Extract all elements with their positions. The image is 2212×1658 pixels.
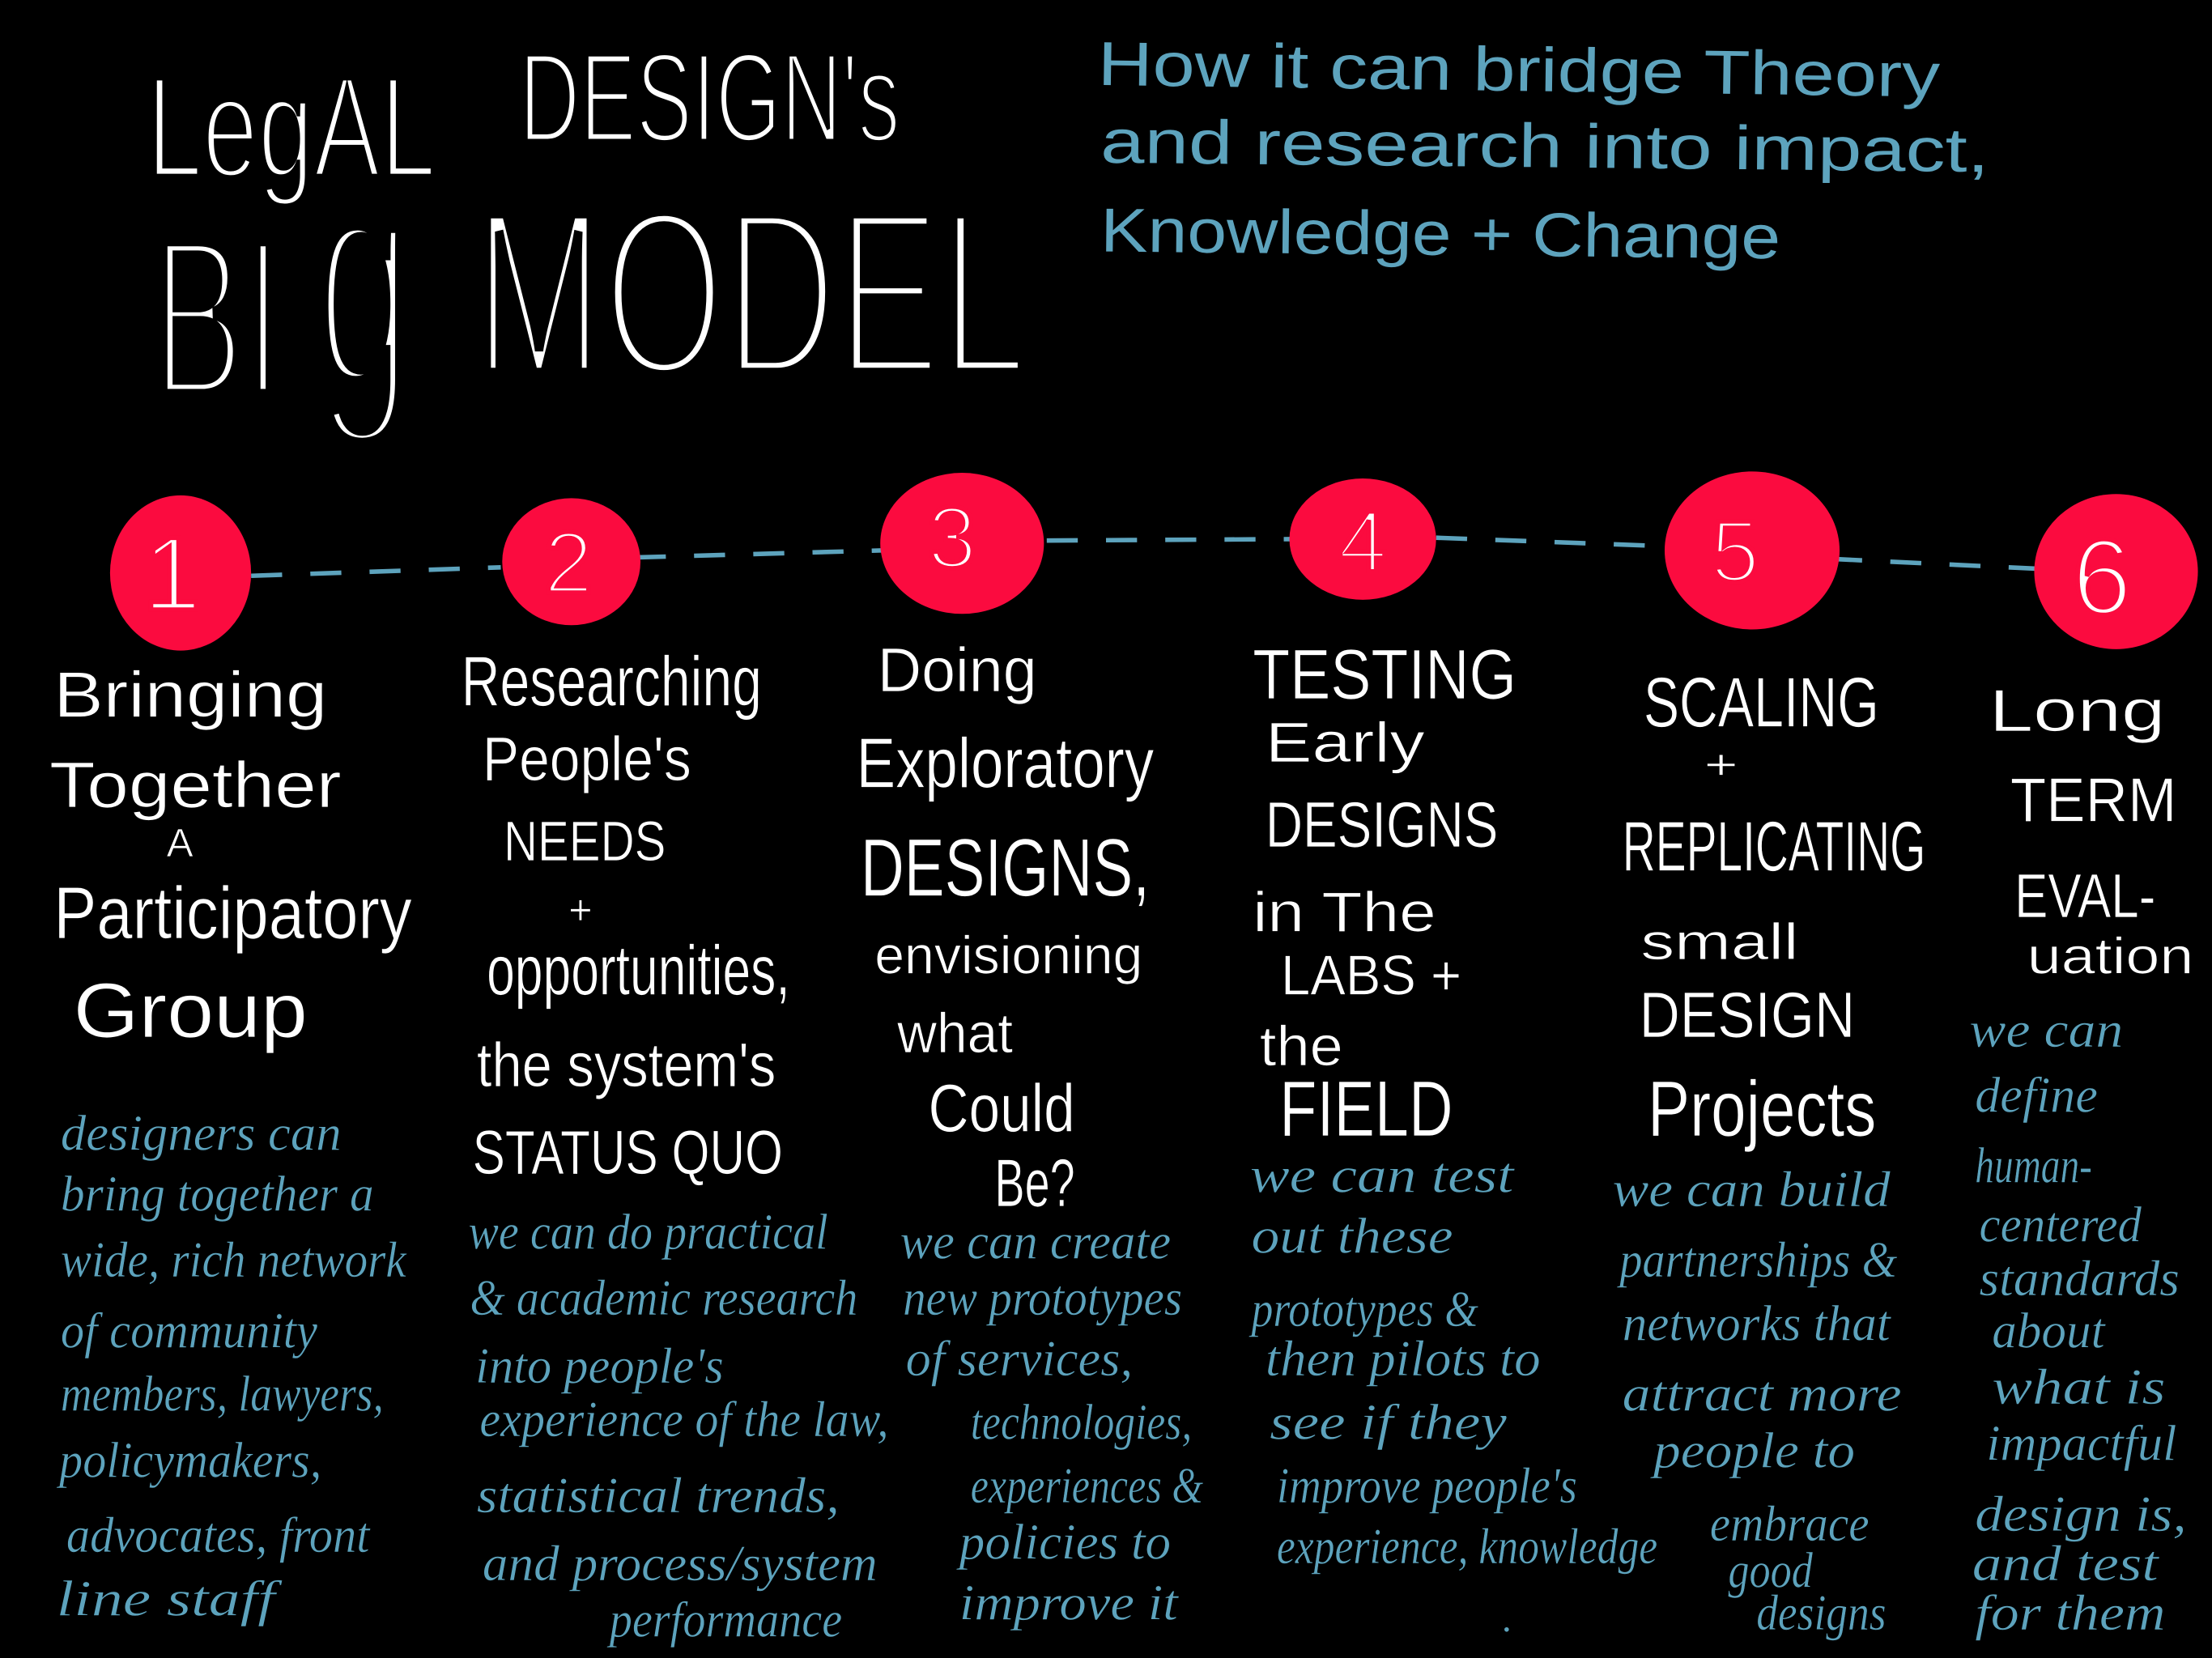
heading 2: STATUS QUO [473,1119,783,1188]
heading 6: uation [2027,929,2193,985]
heading 4: FIELD [1279,1065,1453,1153]
body text 2 [468,1203,889,1647]
step 6: long term evaluation [1969,494,2198,1641]
subtitle: Knowledge + Change [1100,197,1781,272]
body text 5: partnerships & [1617,1231,1898,1288]
body text 2: and process/system [483,1535,878,1592]
body text 5: we can build [1613,1161,1891,1218]
body text 2: performance [606,1591,842,1647]
body text 5: networks that [1623,1295,1891,1352]
step 5: scaling and replicating [1613,471,1925,1641]
body text 4 [1249,1147,1657,1632]
heading 2: + [568,887,593,934]
heading 3 [857,636,1155,1221]
number badge 3: 3 [928,488,976,586]
heading 1: Together [49,748,342,821]
body text 5: people to [1650,1422,1855,1478]
body text 6: about [1992,1302,2106,1358]
body text 2: & academic research [470,1269,857,1326]
body text 1: of community [61,1302,317,1358]
heading 3: DESIGNS, [861,823,1150,914]
heading 6: EVAL- [2014,862,2155,931]
number badge 1 [110,495,251,651]
step 4: testing early designs [1249,478,1657,1632]
heading 5 [1623,664,1925,1153]
body text 5: designs [1756,1584,1887,1641]
heading 1: Group [74,967,308,1054]
heading 1: Bringing [53,657,327,730]
number badge 5: 5 [1711,502,1759,600]
title: DESIGN's [519,28,900,169]
body text 2: into people's [475,1337,724,1394]
heading 4: TESTING [1253,636,1516,714]
body text 1: designers can [61,1104,342,1161]
body text 1: members, lawyers, [61,1366,384,1422]
heading 4 [1253,636,1516,1153]
heading 2: Researching [462,643,762,721]
heading 2: NEEDS [504,810,666,873]
heading 2 [462,643,790,1188]
body text 6: design is, [1975,1486,2187,1542]
title: g [316,110,412,450]
body text 6: and test [1972,1535,2160,1592]
title: MODEL [474,161,1027,424]
dashed timeline connecting the steps [251,538,2039,576]
body text 4: then pilots to [1266,1330,1541,1387]
heading 5: small [1640,914,1798,971]
body text 4: experience, knowledge [1277,1518,1657,1575]
number badge 4 [1290,478,1436,600]
number badge 2: 2 [544,513,593,611]
heading 3: Exploratory [857,725,1155,803]
body text 3: improve it [959,1575,1180,1631]
body text 3: policies to [956,1514,1171,1571]
body text 5: attract more [1623,1366,1902,1422]
body text 1: bring together a [61,1165,374,1222]
body text 1: wide, rich network [61,1231,407,1288]
body text 5: embrace [1710,1495,1870,1552]
body text 6: we can [1969,1001,2123,1058]
body text 6: impactful [1986,1415,2176,1472]
heading 3: envisioning [874,926,1142,986]
heading 6: Long [1989,678,2166,744]
heading 5: Projects [1648,1065,1876,1153]
number badge 4: 4 [1338,492,1387,590]
heading 3: Be? [994,1145,1075,1221]
heading 4: in The [1253,880,1436,943]
body text 5: good [1728,1542,1813,1599]
body text 3: of services, [906,1330,1133,1387]
body text 4: improve people's [1277,1457,1577,1514]
subtitle: How it can bridge Theory [1097,30,1941,110]
body text 6: define [1975,1066,2098,1123]
subtitle: and research into impact, [1100,108,1989,185]
number badge 2 [502,498,640,625]
number badge 1: 1 [143,516,201,632]
body text 1: advocates, front [66,1507,371,1563]
heading 6 [1989,678,2193,985]
body text 5 [1613,1161,1902,1641]
heading 3: what [896,1001,1013,1065]
number badge 3 [880,473,1044,614]
number badge 6 [2034,494,2198,649]
body text 3: experiences & [971,1457,1203,1514]
heading 2: the system's [477,1031,776,1100]
body text 3: new prototypes [903,1269,1182,1326]
heading 5: DESIGN [1640,978,1855,1051]
heading 4: Early [1266,711,1425,774]
body text 3 [900,1214,1203,1631]
body text 2: we can do practical [468,1203,828,1260]
body text 2: experience of the law, [479,1391,889,1448]
body text 4: prototypes & [1249,1281,1478,1337]
body text 6: standards [1980,1250,2180,1307]
body text 6: centered [1980,1197,2142,1253]
heading 3: Doing [878,636,1037,705]
step 1: bringing together a participatory group [49,495,412,1626]
heading 3: Could [928,1070,1075,1146]
heading 1: Participatory [53,873,412,954]
title: LegAL [147,46,436,207]
body text 1: policymakers, [56,1432,321,1489]
body text 4: out these [1251,1208,1453,1265]
body text 3: we can create [900,1214,1171,1270]
title: BI [152,192,282,444]
body text 1: line staff [57,1570,283,1626]
heading 4: the [1260,1014,1343,1078]
heading 2: People's [483,725,691,794]
body text 4: see if they [1270,1394,1507,1451]
heading 4: DESIGNS [1266,788,1498,861]
heading 2: opportunities, [487,932,790,1010]
body text 6: for them [1975,1584,2166,1641]
number badge 5 [1665,471,1840,629]
body text 6: what is [1992,1358,2166,1415]
number badge 6: 6 [2072,517,2132,637]
heading 5: + [1704,742,1738,789]
step 2: researching people's needs [462,498,889,1647]
subtitle [1097,30,1989,272]
body text 1 [56,1104,407,1626]
heading 1 [49,657,412,1054]
title [147,28,1027,450]
heading 1: A [167,822,194,865]
heading 6: TERM [2010,766,2176,835]
body text 4: we can test [1250,1147,1515,1204]
body text 3: technologies, [971,1394,1192,1451]
body text 6 [1969,1001,2187,1641]
body text 2: statistical trends, [477,1467,840,1524]
body text 6: human- [1975,1137,2092,1193]
heading 5: REPLICATING [1623,807,1925,886]
step 3: doing exploratory designs [857,473,1203,1631]
heading 5: SCALING [1644,664,1879,742]
heading 4: LABS + [1281,944,1461,1007]
